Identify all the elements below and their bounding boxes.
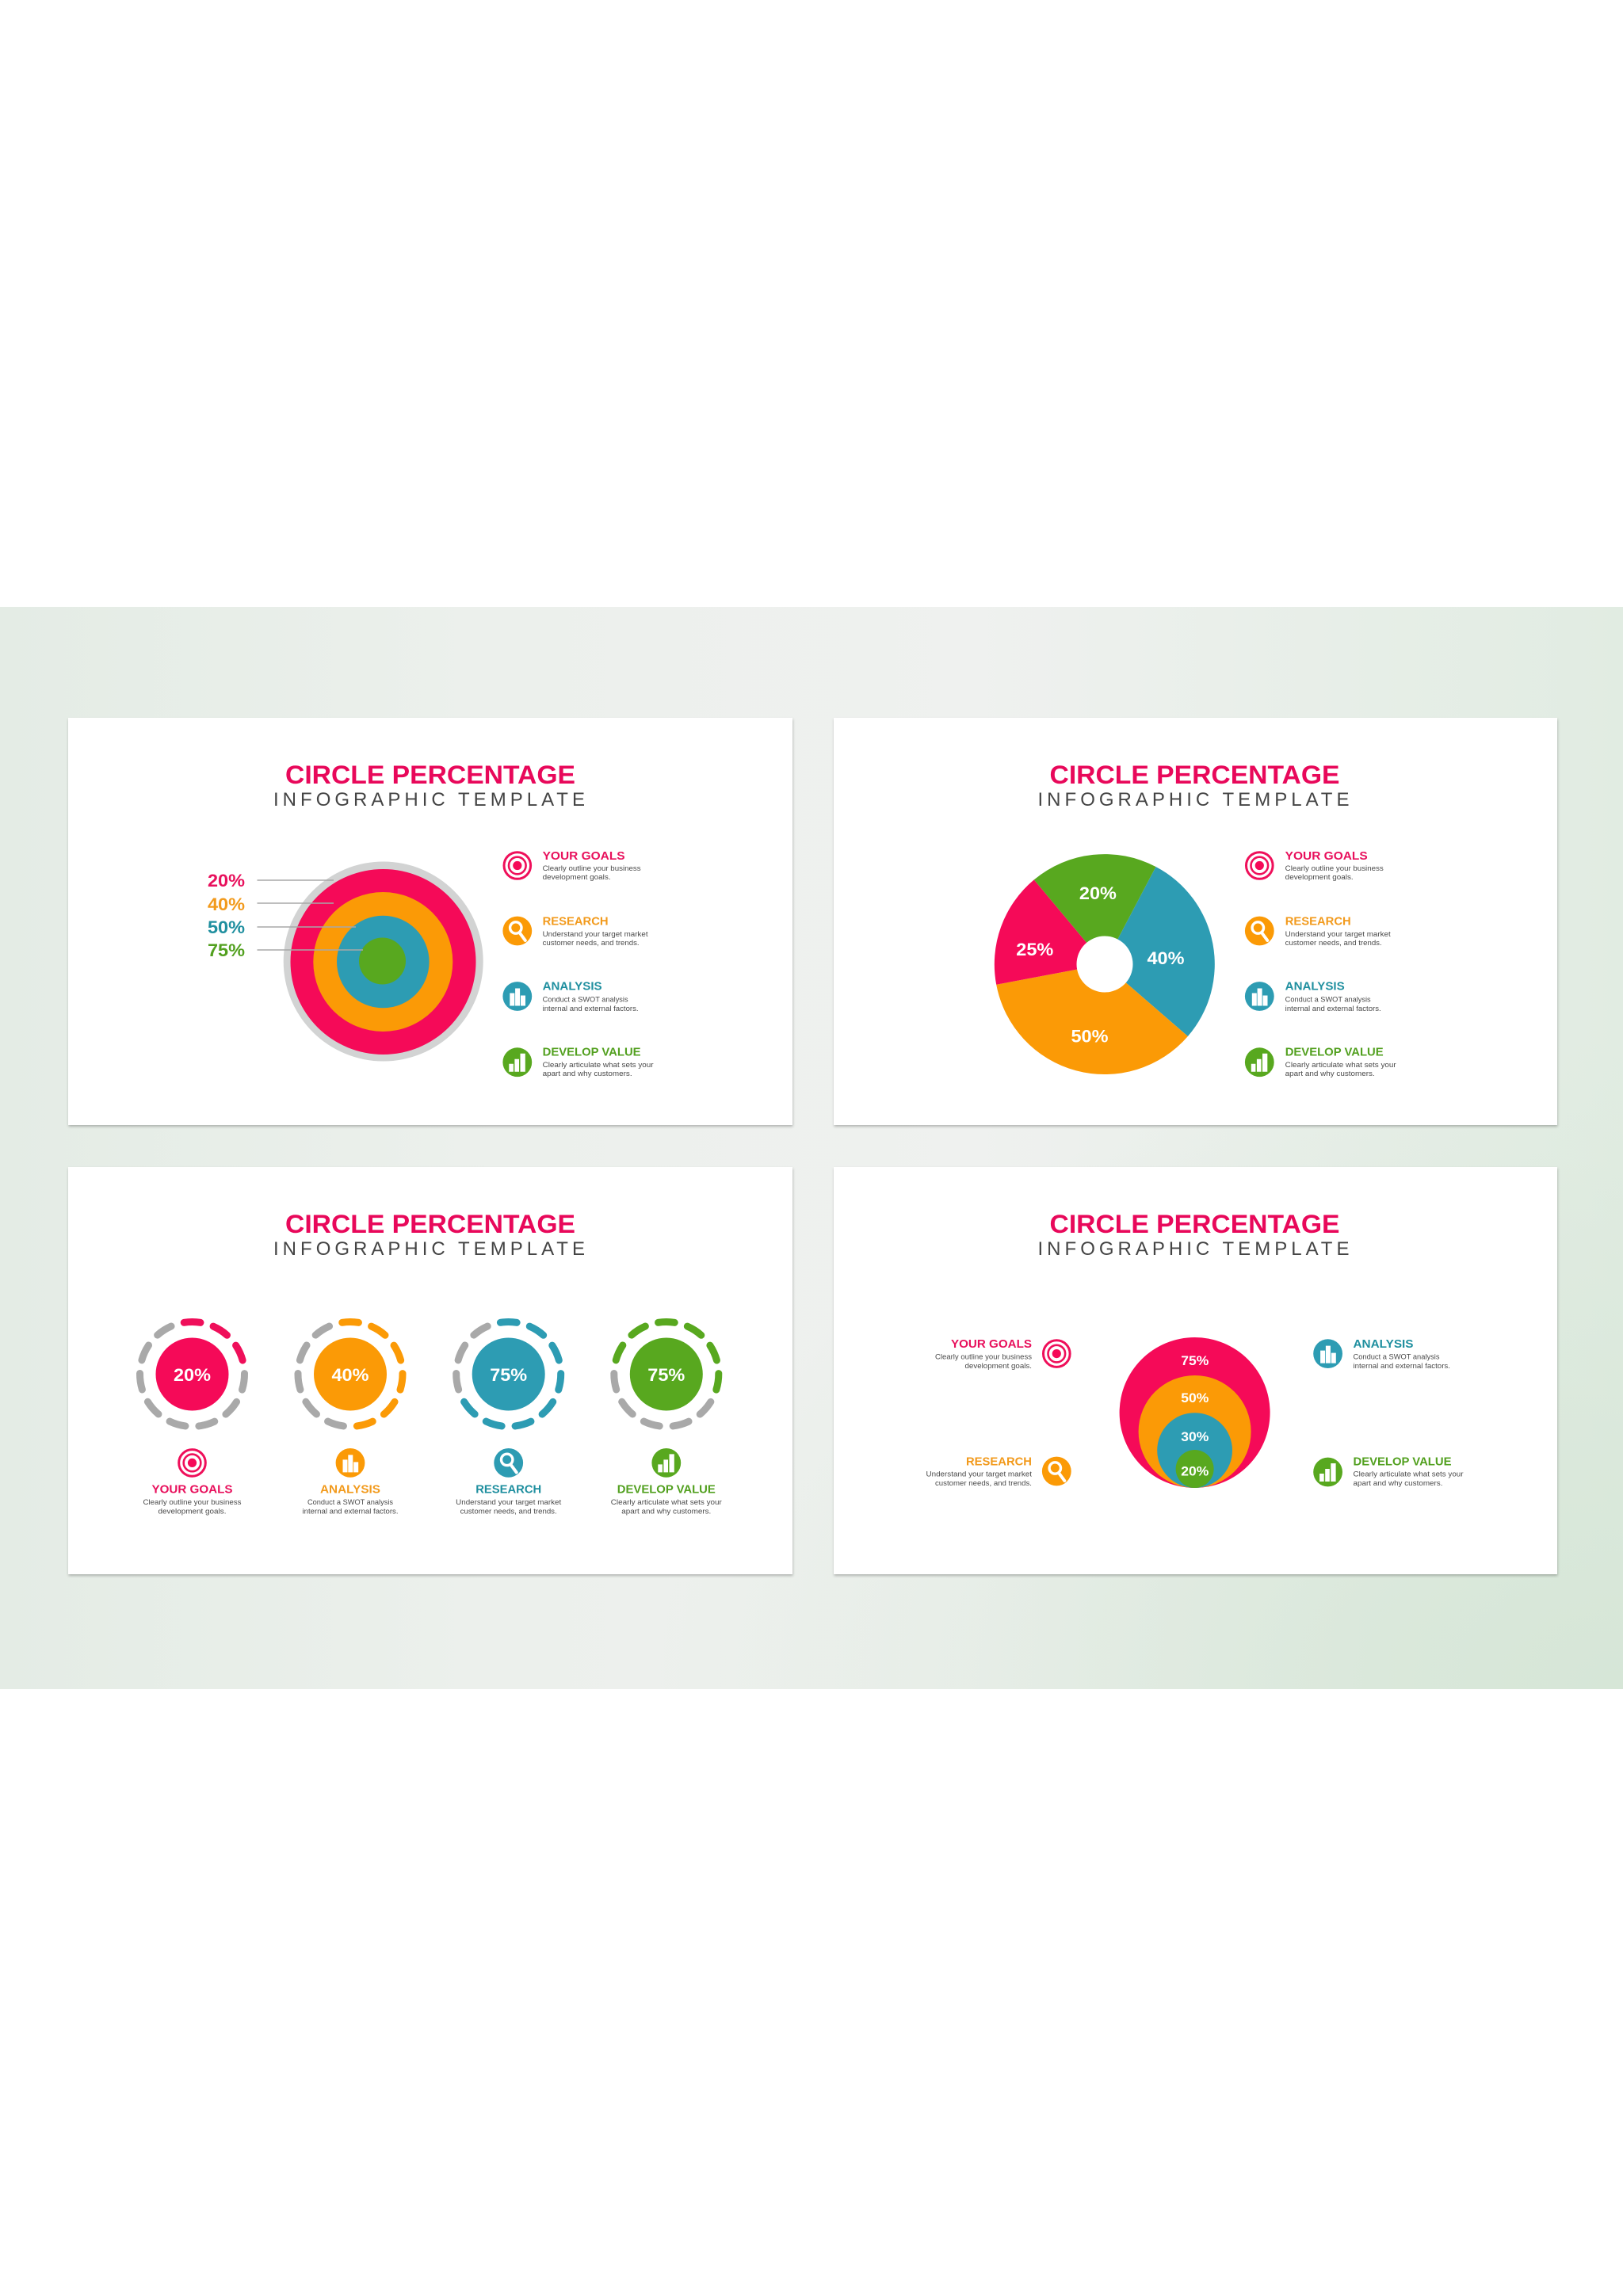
gauge: 40% analysis bbox=[277, 1300, 424, 1515]
legend: research: customer needs, and trends. bbox=[1285, 939, 1382, 947]
gauge: 20% your goals: Clearly outline your business bbox=[143, 1498, 242, 1506]
legend: develop value: Clearly articulate what sets your bbox=[1354, 1470, 1463, 1478]
chart: nested circles: 30% bbox=[1181, 1429, 1209, 1444]
legend: analysis: Conduct a SWOT analysis bbox=[1285, 995, 1371, 1003]
legend: your goals: YOUR GOALS bbox=[951, 1337, 1032, 1351]
chart: donut: 40% bbox=[1148, 948, 1184, 968]
legend: develop value: apart and why customers. bbox=[1285, 1070, 1375, 1077]
gauge: 75% develop value: DEVELOP VALUE bbox=[617, 1483, 716, 1496]
chart: donut: 50% bbox=[1071, 1027, 1108, 1046]
legend: analysis: internal and external factors. bbox=[543, 1005, 639, 1013]
legend: research bbox=[502, 914, 648, 947]
legend: analysis: ANALYSIS bbox=[1354, 1337, 1414, 1351]
legend: research: RESEARCH bbox=[543, 914, 609, 929]
panel: concentric target chart bbox=[68, 718, 792, 1125]
legend: research: RESEARCH bbox=[1285, 914, 1351, 929]
legend: develop value: Clearly articulate what sets your bbox=[543, 1061, 654, 1069]
percentage labels: 50% bbox=[208, 917, 245, 937]
legend: develop value: apart and why customers. bbox=[543, 1070, 632, 1077]
legend: develop value bbox=[502, 1046, 654, 1077]
gauge: 20% your goals: YOUR GOALS bbox=[152, 1483, 233, 1496]
gauge: 40% analysis: Conduct a SWOT analysis bbox=[307, 1498, 393, 1506]
legend: research bbox=[1245, 914, 1391, 947]
legend: analysis bbox=[1245, 979, 1381, 1013]
percentage labels: 40% bbox=[208, 894, 245, 914]
legend: analysis: Conduct a SWOT analysis bbox=[1354, 1353, 1440, 1361]
legend: analysis: internal and external factors. bbox=[1285, 1005, 1381, 1013]
legend: develop value bbox=[1245, 1046, 1396, 1077]
heading: panel 4 title: INFOGRAPHIC TEMPLATE bbox=[1038, 1238, 1349, 1260]
leader lines bbox=[257, 880, 363, 950]
chart: nested circles: 50% bbox=[1181, 1390, 1209, 1405]
legend: analysis: Conduct a SWOT analysis bbox=[543, 995, 628, 1003]
gauge: 75% research: customer needs, and trends. bbox=[460, 1507, 557, 1515]
gauge: 75% research bbox=[435, 1300, 582, 1515]
legend: develop value bbox=[1313, 1455, 1463, 1487]
chart: nested circles: 20% bbox=[1181, 1464, 1209, 1478]
chart: nested circles bbox=[1120, 1337, 1270, 1488]
legend: your goals bbox=[1246, 849, 1384, 881]
legend: develop value: DEVELOP VALUE bbox=[1285, 1046, 1384, 1058]
gauge: 20% your goals: 20% bbox=[174, 1365, 211, 1385]
chart: concentric circles bbox=[284, 862, 483, 1062]
chart: donut: 25% bbox=[1016, 940, 1053, 959]
legend: your goals bbox=[504, 849, 641, 881]
heading: panel 2 title: CIRCLE PERCENTAGE bbox=[1049, 761, 1339, 789]
gauge: 40% analysis: 40% bbox=[331, 1365, 369, 1385]
legend: your goals: Clearly outline your business bbox=[1285, 864, 1384, 872]
legend: research: customer needs, and trends. bbox=[543, 939, 640, 947]
gauge: 20% your goals: development goals. bbox=[158, 1507, 227, 1515]
percentage labels: 75% bbox=[208, 940, 245, 960]
percentage labels: 20% bbox=[208, 871, 245, 891]
percentage labels bbox=[208, 871, 245, 960]
legend: research: Understand your target market bbox=[543, 930, 648, 938]
panel: nested circles bbox=[834, 1167, 1557, 1574]
legend: analysis bbox=[1313, 1337, 1450, 1370]
heading: panel 4 title: CIRCLE PERCENTAGE bbox=[1049, 1210, 1339, 1238]
heading: panel 3 title: INFOGRAPHIC TEMPLATE bbox=[273, 1238, 585, 1260]
gauge: 75% develop value: 75% bbox=[647, 1365, 685, 1385]
legend: research: customer needs, and trends. bbox=[935, 1479, 1032, 1487]
legend: analysis: ANALYSIS bbox=[543, 979, 602, 994]
legend: research: Understand your target market bbox=[1285, 930, 1391, 938]
legend: your goals: YOUR GOALS bbox=[543, 849, 625, 863]
legend: your goals: development goals. bbox=[543, 873, 611, 881]
legend: research: RESEARCH bbox=[966, 1455, 1032, 1468]
chart: donut bbox=[995, 854, 1215, 1074]
legend: develop value: DEVELOP VALUE bbox=[543, 1046, 641, 1058]
legend: research bbox=[926, 1455, 1071, 1487]
background band bbox=[0, 607, 1623, 1689]
heading: panel 2 title: INFOGRAPHIC TEMPLATE bbox=[1038, 789, 1349, 810]
heading: panel 3 title: CIRCLE PERCENTAGE bbox=[285, 1210, 575, 1238]
heading: panel 3 title bbox=[273, 1210, 585, 1260]
heading: panel 4 title bbox=[1038, 1210, 1349, 1260]
gauge: 20% your goals bbox=[118, 1300, 266, 1515]
legend: develop value: Clearly articulate what sets your bbox=[1285, 1061, 1396, 1069]
gauge: 40% analysis: internal and external factors. bbox=[303, 1507, 398, 1515]
legend: analysis: internal and external factors. bbox=[1354, 1362, 1450, 1370]
gauge: 75% research: Understand your target market bbox=[456, 1498, 562, 1506]
heading: panel 1 title: INFOGRAPHIC TEMPLATE bbox=[273, 789, 585, 810]
gauge: 40% analysis: ANALYSIS bbox=[320, 1483, 380, 1496]
heading: panel 2 title bbox=[1038, 761, 1349, 810]
legend: your goals: development goals. bbox=[965, 1362, 1032, 1370]
gauge: 75% develop value bbox=[593, 1300, 740, 1515]
chart: donut: 20% bbox=[1079, 883, 1117, 903]
legend: analysis bbox=[502, 979, 639, 1013]
legend: develop value: DEVELOP VALUE bbox=[1354, 1455, 1452, 1468]
panel: dashed ring gauges bbox=[68, 1167, 792, 1574]
legend: your goals: Clearly outline your business bbox=[935, 1353, 1033, 1361]
legend: your goals: development goals. bbox=[1285, 873, 1354, 881]
panel: donut chart bbox=[834, 718, 1557, 1125]
legend: your goals: Clearly outline your business bbox=[543, 864, 641, 872]
legend: develop value: apart and why customers. bbox=[1354, 1479, 1442, 1487]
chart: nested circles: 75% bbox=[1181, 1353, 1209, 1368]
gauge: 75% research: RESEARCH bbox=[475, 1483, 541, 1496]
legend: your goals bbox=[935, 1337, 1070, 1370]
gauge: 75% develop value: apart and why customers. bbox=[621, 1507, 711, 1515]
gauge: 75% research: 75% bbox=[490, 1365, 527, 1385]
legend: your goals: YOUR GOALS bbox=[1285, 849, 1368, 863]
heading: panel 1 title: CIRCLE PERCENTAGE bbox=[285, 761, 575, 789]
heading: panel 1 title bbox=[273, 761, 585, 810]
legend: analysis: ANALYSIS bbox=[1285, 979, 1345, 994]
legend: research: Understand your target market bbox=[926, 1470, 1033, 1478]
gauge: 75% develop value: Clearly articulate what sets your bbox=[611, 1498, 722, 1506]
